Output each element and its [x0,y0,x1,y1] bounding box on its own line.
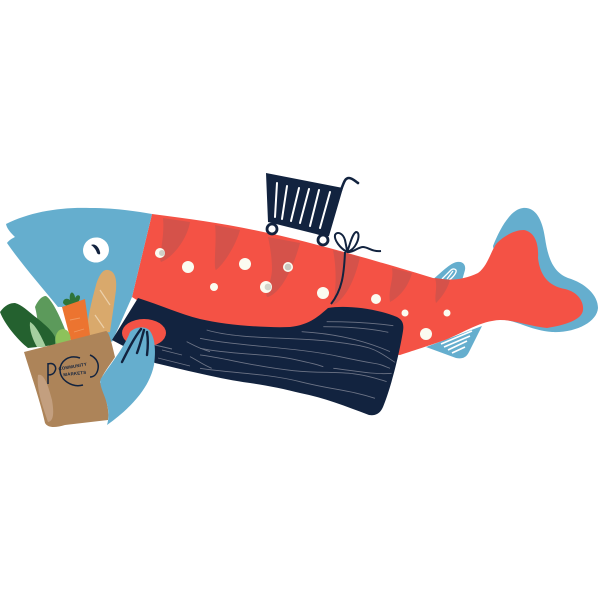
icon: lower rear fin [426,326,482,358]
icon: grocery bag with logo: COMMUNITY [58,362,87,371]
icon: grocery bag with logo: MARKETS [63,370,87,377]
icon: eye [80,235,112,265]
icon: grocery bag with logo [24,331,115,427]
icon: red hand circle [122,319,166,347]
fish head [6,208,152,342]
icon: upper rear fin [430,262,465,284]
icon: shopping cart [266,173,358,245]
dark sleeve with wood lines [112,298,403,415]
icon: string and bow [331,232,381,304]
fish body [132,214,583,355]
body spots [155,248,450,340]
icon: bread [87,270,116,336]
body stripes [160,218,450,305]
icon: blue fin holding bag [100,327,155,425]
tail back layer [493,208,598,332]
icon: leafy greens [0,296,70,349]
icon: carrot [62,292,90,345]
